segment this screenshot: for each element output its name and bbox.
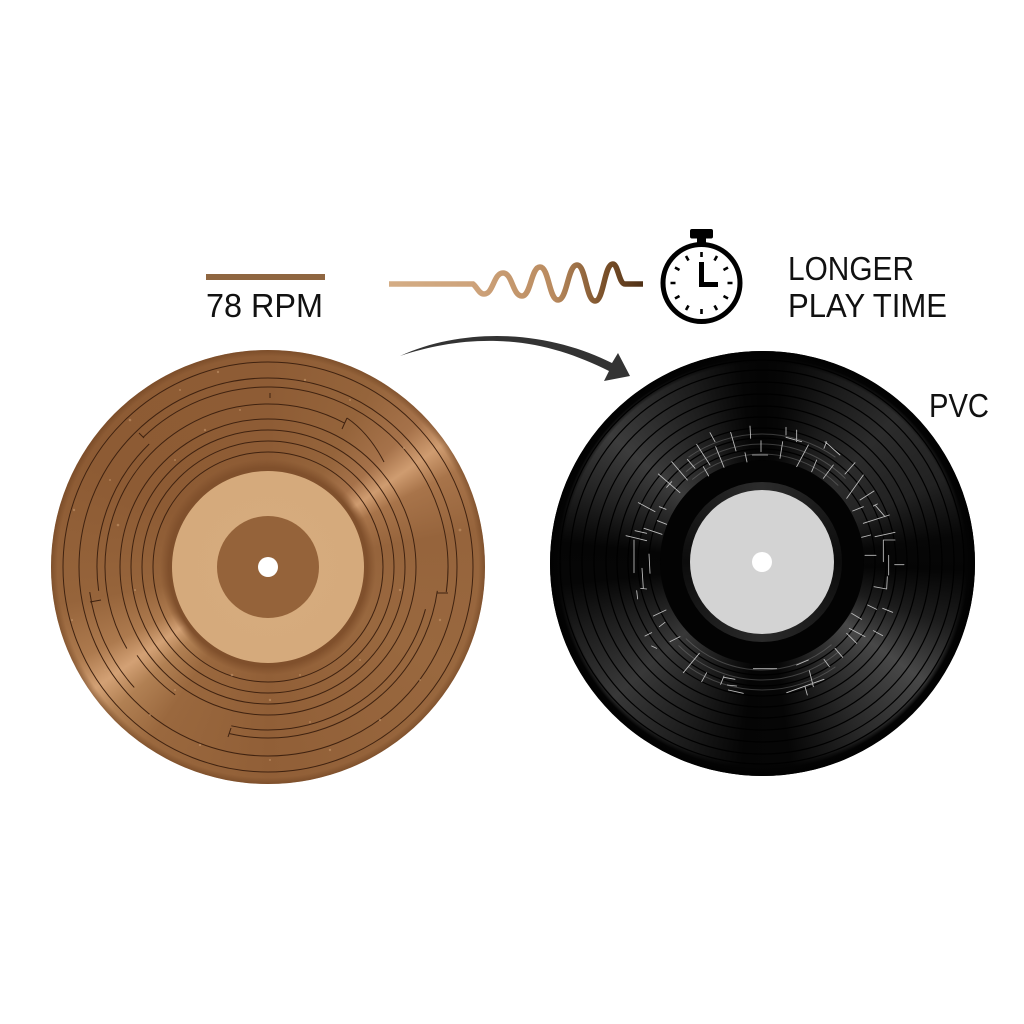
vinyl label [690,490,834,634]
78 RPM label: 78 RPM [206,287,323,324]
label surround ring [682,482,842,642]
ring around label [160,459,376,675]
curved arrow [400,336,630,381]
waveform line [389,264,643,301]
vinyl inner dead wax [660,460,864,664]
spindle hole [258,557,278,577]
vinyl outer rim [550,351,975,776]
record edge shading [51,350,485,784]
icon: stopwatch [663,229,740,322]
vinyl spindle hole [752,552,772,572]
record label [172,471,364,663]
panel: 78 RPM shellac record [51,350,485,784]
PVC label: PVC [929,387,989,424]
panel: PVC vinyl record [550,351,975,776]
vinyl body with sheen [550,351,975,776]
78 RPM groove bar [206,274,325,280]
label centre [217,516,319,618]
longer play time label: PLAY TIME [788,287,947,324]
longer play time label: LONGER [788,250,914,287]
record body with sheen [51,350,485,784]
